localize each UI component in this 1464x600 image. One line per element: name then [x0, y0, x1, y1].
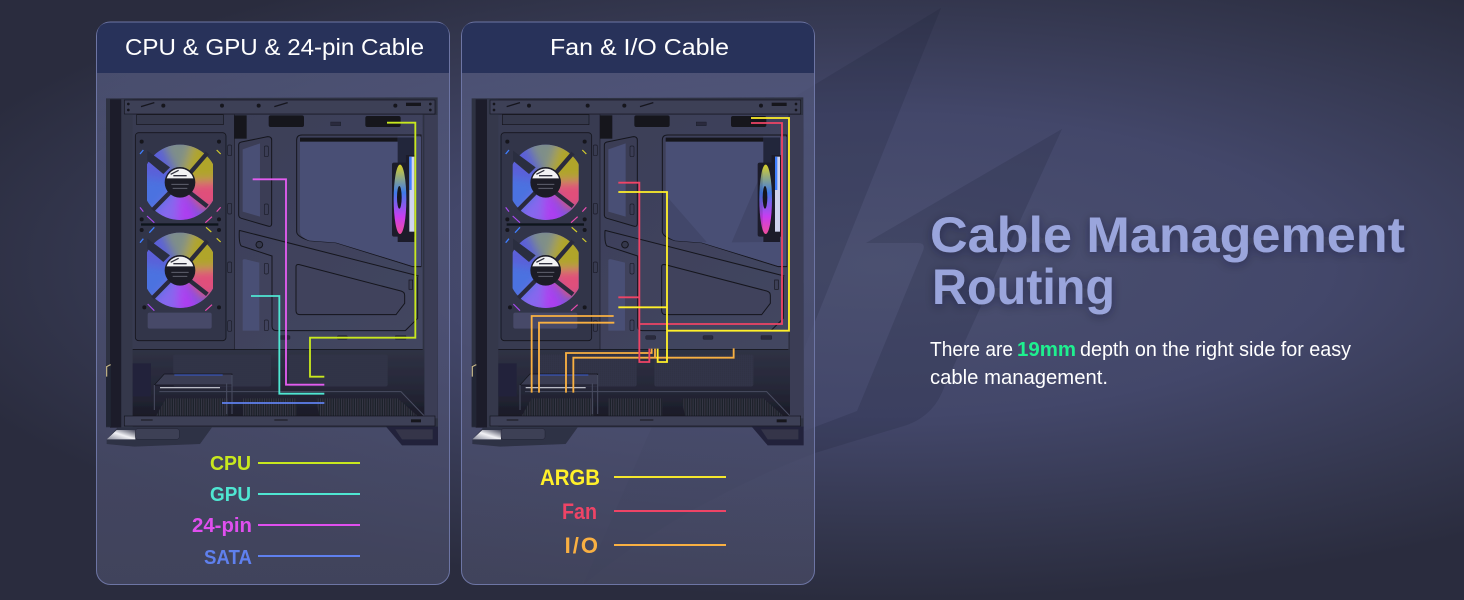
- panel header: [462, 22, 814, 73]
- panel: Fan and I/O cable: [462, 22, 814, 584]
- panel: CPU, GPU and 24-pin cable: [96, 22, 450, 584]
- description text: [930, 339, 1351, 389]
- cable: 24-pin: [253, 179, 324, 385]
- PC case side view with routed cables: [106, 97, 438, 447]
- title: Routing: [932, 259, 1115, 315]
- panel header: Fan & I/O Cable: [550, 34, 729, 60]
- cable: GPU: [251, 296, 324, 394]
- legend item: ARGB: ARGB: [540, 465, 600, 490]
- description text: 19mm: [1017, 339, 1076, 361]
- title: Cable Management: [930, 207, 1405, 263]
- legend item: GPU: GPU: [210, 484, 251, 506]
- legend item: 24-pin: 24-pin: [192, 515, 252, 537]
- cable: CPU: [310, 123, 415, 377]
- legend item: Fan: Fan: [562, 499, 597, 524]
- legend item: I/O: I/O: [565, 533, 600, 558]
- description text: depth on the right side for easy: [1080, 339, 1351, 361]
- PC case side view with routed cables: [472, 97, 804, 447]
- cable: ARGB: [618, 118, 789, 362]
- cable: SATA: [222, 400, 324, 406]
- panel header: [97, 22, 449, 73]
- cable: Fan: [618, 123, 782, 362]
- lightning logo watermark: [583, 8, 1062, 585]
- title: [930, 207, 1405, 315]
- legend item: SATA: SATA: [204, 547, 252, 569]
- cable: I/O: [532, 316, 734, 393]
- legend item: CPU: CPU: [210, 453, 251, 475]
- panel header: CPU & GPU & 24-pin Cable: [125, 34, 424, 60]
- description text: cable management.: [930, 367, 1108, 389]
- description text: There are: [930, 339, 1013, 361]
- watermark seen through the case window: [667, 170, 763, 242]
- legend: power and data cables: [192, 453, 360, 569]
- legend: fan and I/O cables: [540, 465, 726, 558]
